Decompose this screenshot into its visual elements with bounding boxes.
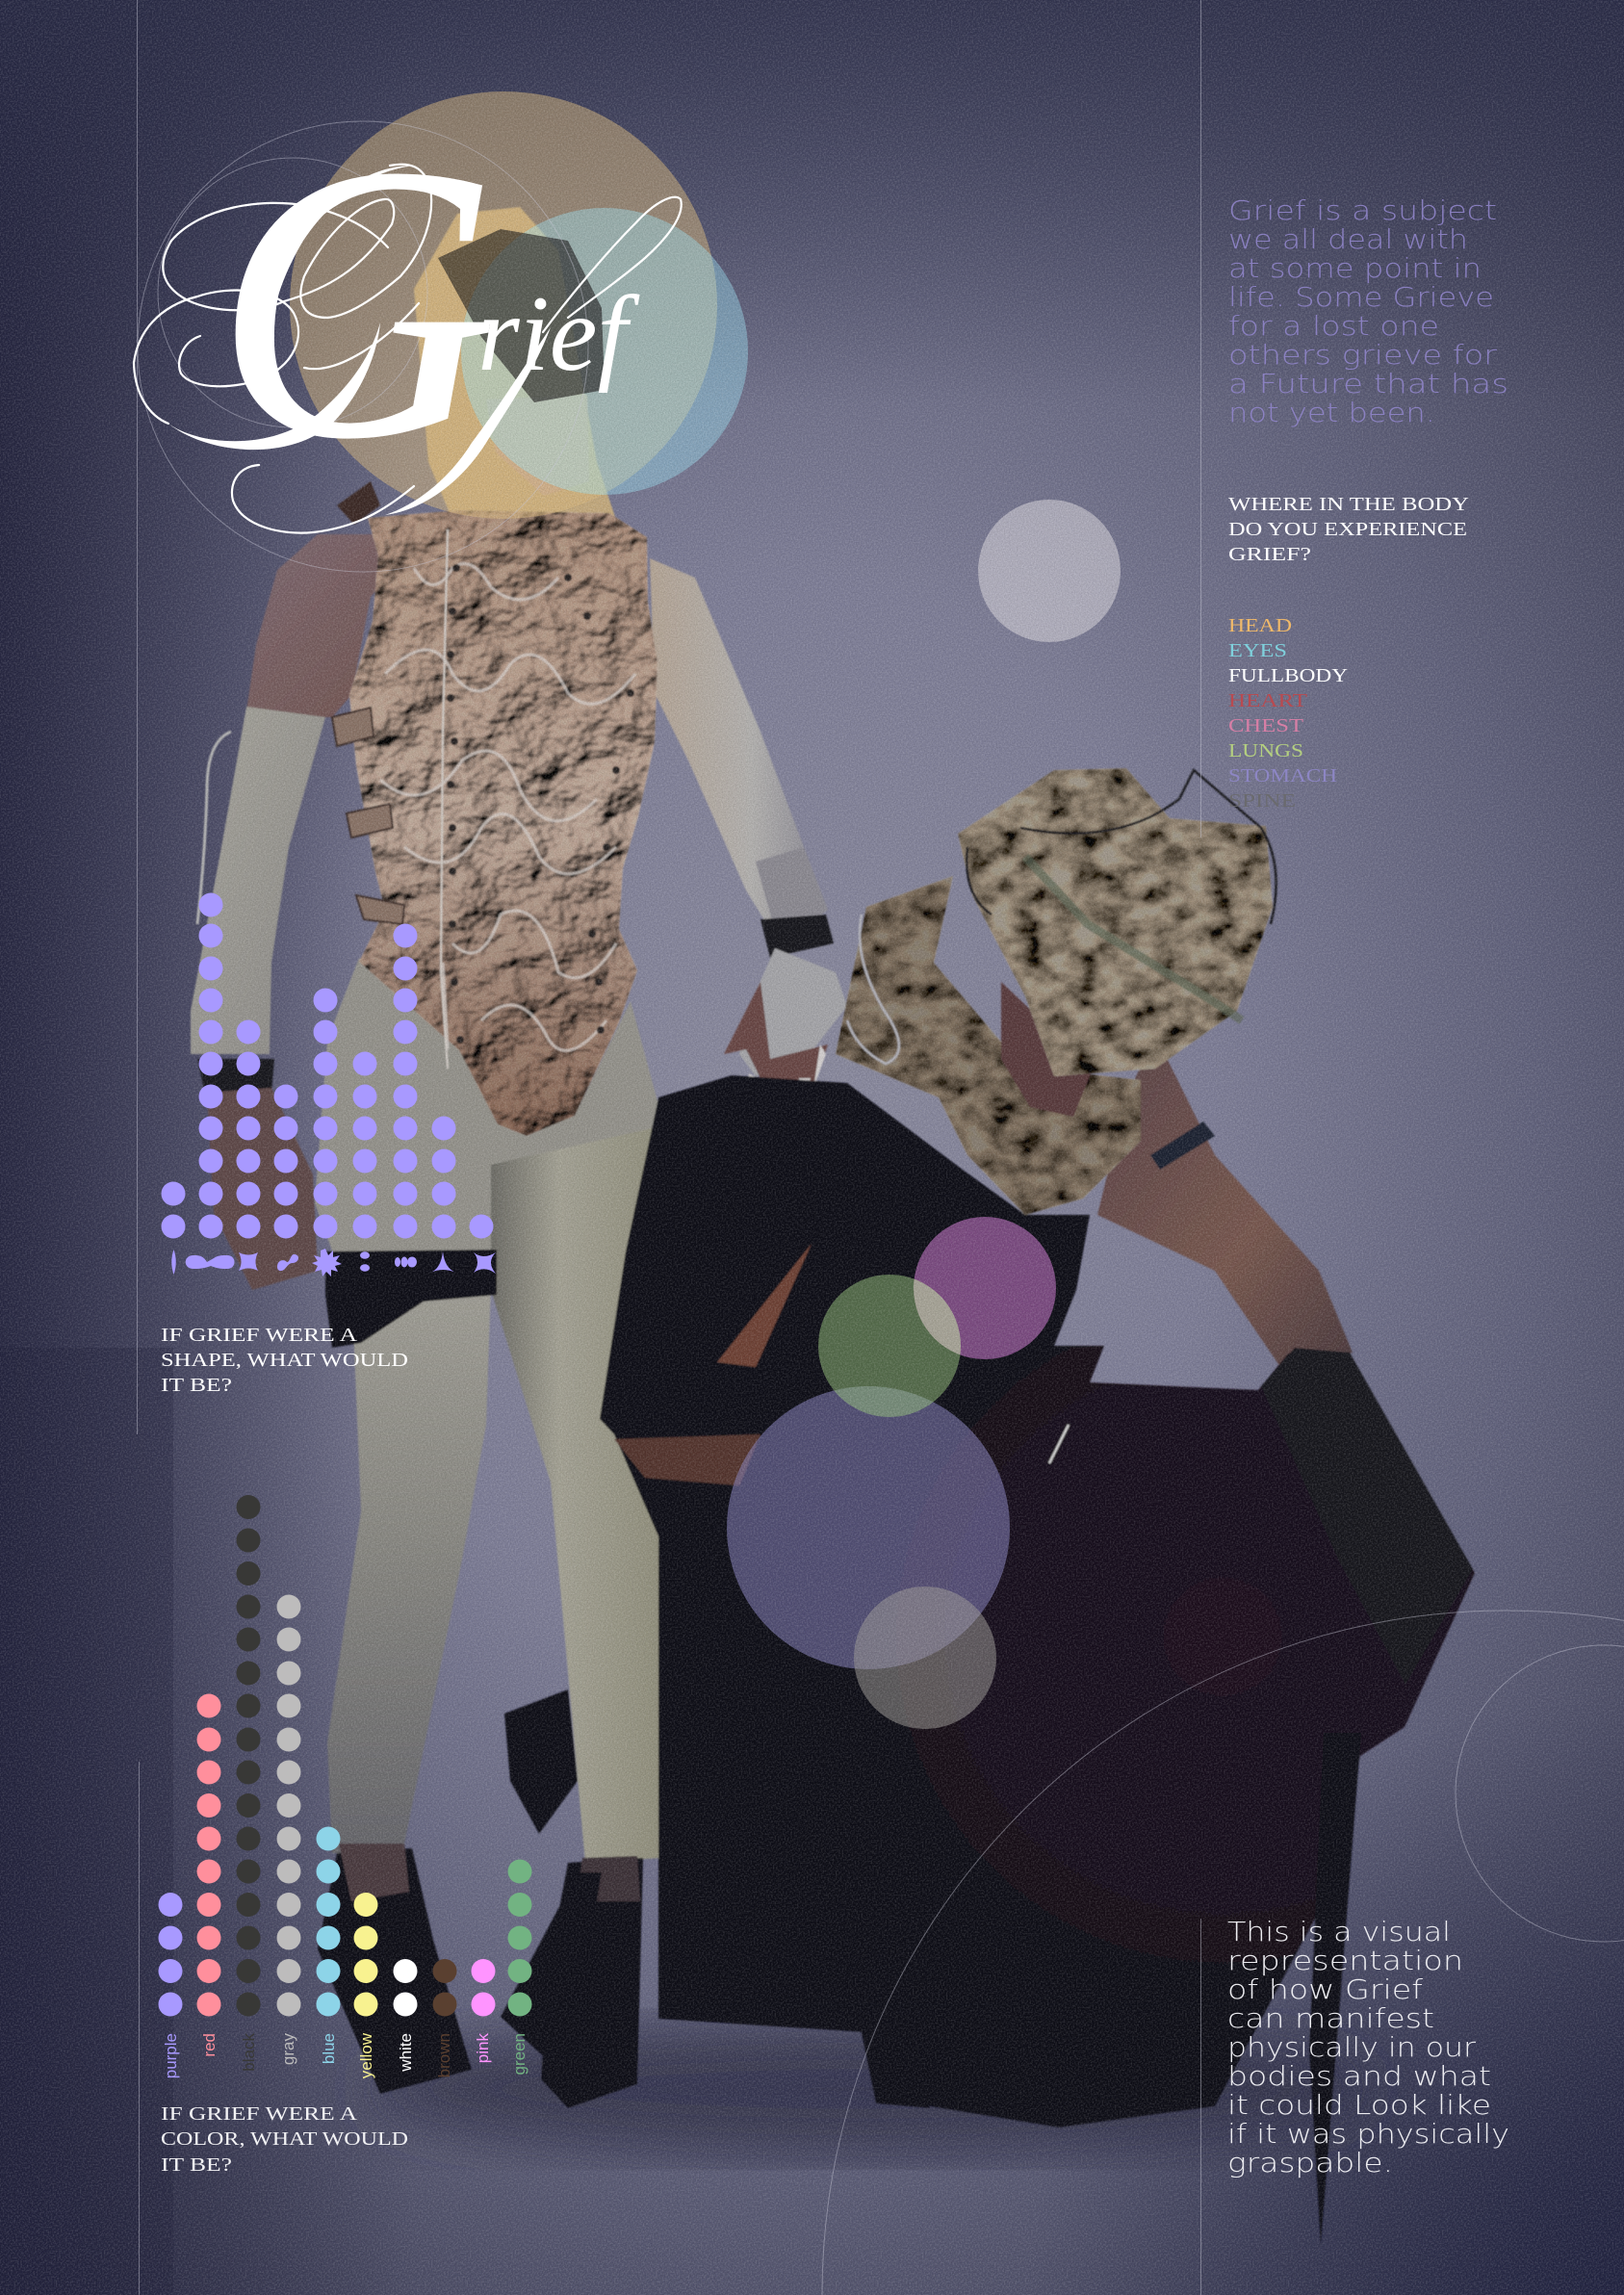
bodice side buckles xyxy=(332,708,404,924)
right arm sleeve xyxy=(650,558,820,939)
colour labels: black xyxy=(240,2033,258,2072)
caption: colour question: IF GRIEF WERE A xyxy=(161,2103,358,2125)
shape dot chart xyxy=(162,893,496,1276)
title thick swashes xyxy=(168,322,380,450)
legend: body locations: EYES xyxy=(1228,640,1287,661)
colour labels: red xyxy=(200,2033,219,2057)
intro paragraph: at some point in xyxy=(1228,252,1482,284)
green column xyxy=(508,1860,531,2016)
kneeling figure xyxy=(501,768,1475,2245)
bodice rivets xyxy=(447,564,634,1044)
icon: four point star xyxy=(474,1252,496,1274)
face xyxy=(486,395,589,496)
caption: shape question: IF GRIEF WERE A xyxy=(161,1325,358,1346)
closing paragraph: bodies and what xyxy=(1227,2060,1491,2092)
visor under the circles xyxy=(438,229,605,402)
heading: where in the body: DO YOU EXPERIENCE xyxy=(1228,519,1467,540)
left arm gauntlet xyxy=(191,707,325,1054)
forearm skin xyxy=(614,1434,760,1485)
shoulder cutout skin xyxy=(717,1244,812,1367)
caption: shape question xyxy=(161,1325,408,1396)
mask rim band xyxy=(1025,857,1242,1020)
left leg xyxy=(327,1280,491,1853)
heading: where in the body: GRIEF? xyxy=(1228,544,1311,565)
icon: three blobs xyxy=(395,1257,417,1267)
caption: colour question: COLOR, WHAT WOULD xyxy=(161,2128,408,2150)
closing paragraph: representation xyxy=(1227,1945,1463,1976)
legend: body locations: HEAD xyxy=(1228,615,1292,636)
wrist cuff xyxy=(197,1059,274,1102)
right hand fingers xyxy=(724,982,828,1141)
title flourishes xyxy=(134,165,682,533)
right platform shoe xyxy=(541,1858,643,2108)
intro paragraph xyxy=(1228,194,1508,428)
closing paragraph: physically in our xyxy=(1227,2031,1477,2063)
right arm of kneeling figure xyxy=(1097,1035,1353,1367)
column 3 xyxy=(237,1020,260,1238)
column 6 xyxy=(352,1051,377,1238)
left upper arm xyxy=(245,534,424,717)
intro paragraph: others grieve for xyxy=(1228,339,1498,371)
intro paragraph: a Future that has xyxy=(1228,368,1508,400)
legend: body locations xyxy=(1228,615,1348,812)
black cloak and armour xyxy=(600,1075,1475,2127)
column 2 xyxy=(198,893,223,1238)
blue column xyxy=(316,1827,341,2016)
camouflage collar xyxy=(836,876,1141,1215)
stitching marks on cloak xyxy=(1049,1425,1069,1463)
colour labels: brown xyxy=(435,2033,453,2077)
bodice wavy ridges xyxy=(380,564,635,1050)
icon: concave square xyxy=(239,1252,258,1271)
intro paragraph: for a lost one xyxy=(1228,310,1439,342)
left hand xyxy=(207,1088,318,1290)
circle: head (tan) xyxy=(290,91,717,519)
column 4 xyxy=(273,1084,298,1238)
closing paragraph: if it was physically xyxy=(1227,2118,1509,2150)
standing figure xyxy=(191,207,847,2108)
circle: eyes (blue) xyxy=(461,208,748,495)
brown column xyxy=(433,1959,456,2016)
white piping xyxy=(847,915,899,1064)
sword blade xyxy=(1309,1733,1361,2245)
gauntlet hand xyxy=(1261,1348,1473,1685)
purple column xyxy=(158,1893,183,2016)
colour labels: green xyxy=(510,2033,528,2075)
bodice xyxy=(349,510,657,1136)
closing paragraph: This is a visual xyxy=(1227,1916,1451,1947)
left shoulder buckle xyxy=(337,481,380,525)
red column xyxy=(196,1694,221,2016)
wrist band xyxy=(760,915,834,958)
icon: starburst xyxy=(312,1249,342,1276)
photo: two costumed figures xyxy=(191,207,1475,2245)
gauntlet lacing xyxy=(197,732,231,924)
gold headpiece xyxy=(414,207,616,520)
column 1 xyxy=(162,1182,185,1238)
legend: body locations: FULLBODY xyxy=(1228,665,1348,686)
caption: colour question xyxy=(161,2103,408,2176)
legend: body locations: HEART xyxy=(1228,690,1307,711)
circle: chest (pink) xyxy=(914,1217,1056,1359)
colour labels xyxy=(162,2032,528,2078)
heading: where in the body xyxy=(1228,494,1469,565)
circle: lungs (green) xyxy=(818,1275,961,1417)
black column xyxy=(237,1495,260,2016)
icon: s curve xyxy=(277,1254,298,1271)
colour labels: white xyxy=(397,2033,415,2073)
title word: rief xyxy=(477,274,641,394)
skin at left ankle xyxy=(339,1844,409,1901)
bodice centre seam xyxy=(441,529,448,1069)
icon: peanut xyxy=(186,1255,235,1269)
colour labels: purple xyxy=(162,2033,180,2078)
legend: body locations: STOMACH xyxy=(1228,765,1337,786)
column 8 xyxy=(431,1117,456,1238)
colour labels: pink xyxy=(474,2033,492,2063)
skin at right ankle xyxy=(578,1856,640,1901)
colour dot chart xyxy=(158,1495,531,2016)
intro paragraph: life. Some Grieve xyxy=(1228,281,1494,313)
left platform shoe xyxy=(318,1848,472,2094)
floor shadow under figures xyxy=(366,2022,1367,2156)
circle lungs and chest overlap xyxy=(914,1278,961,1355)
arm band xyxy=(1150,1122,1215,1170)
colour labels: blue xyxy=(320,2033,338,2064)
gray column xyxy=(277,1594,300,2016)
legend: body locations: LUNGS xyxy=(1228,740,1303,761)
pink column xyxy=(472,1959,495,2016)
caption: shape question: SHAPE, WHAT WOULD xyxy=(161,1350,408,1371)
yellow column xyxy=(354,1893,377,2016)
claws xyxy=(746,1044,826,1141)
column 7 xyxy=(393,924,418,1238)
circle: spine (gray) xyxy=(854,1586,996,1729)
closing paragraph: of how Grief xyxy=(1227,1973,1423,2005)
title word: G xyxy=(214,84,499,521)
intro paragraph: we all deal with xyxy=(1228,223,1468,255)
cloak train tip xyxy=(847,1964,930,2108)
closing paragraph xyxy=(1227,1916,1509,2179)
ruched glove xyxy=(756,847,828,948)
camouflage mask xyxy=(958,768,1273,1076)
legend: body locations: CHEST xyxy=(1228,715,1303,736)
mask wires xyxy=(967,770,1276,924)
colour labels: yellow xyxy=(357,2032,375,2078)
closing paragraph: graspable. xyxy=(1227,2147,1393,2179)
title: Grief xyxy=(134,84,682,533)
intro paragraph: not yet been. xyxy=(1228,397,1435,428)
icon: thin lens xyxy=(171,1250,176,1275)
right hand glove xyxy=(739,948,847,1076)
closing paragraph: can manifest xyxy=(1227,2002,1434,2034)
icon: concave triangle xyxy=(430,1251,456,1273)
belt xyxy=(325,1250,497,1348)
caption: shape question: IT BE? xyxy=(161,1375,232,1396)
white column xyxy=(393,1959,418,2016)
face skin below mask xyxy=(1001,982,1093,1117)
circle: stomach (purple) xyxy=(727,1386,1010,1669)
icon: stacked ellipses xyxy=(360,1251,370,1272)
circle: fullbody (white) xyxy=(978,500,1121,642)
column 5 xyxy=(314,988,337,1238)
caption: colour question: IT BE? xyxy=(161,2154,232,2176)
colour labels: gray xyxy=(279,2033,297,2065)
closing paragraph: it could Look like xyxy=(1227,2089,1491,2121)
kneeler boot back xyxy=(501,1689,602,2079)
heading: where in the body: WHERE IN THE BODY xyxy=(1228,494,1469,515)
column 9 xyxy=(470,1215,493,1238)
hips xyxy=(315,958,664,1290)
right leg xyxy=(491,1126,660,1863)
intro paragraph: Grief is a subject xyxy=(1228,194,1497,226)
legend: body locations: SPINE xyxy=(1228,790,1296,812)
